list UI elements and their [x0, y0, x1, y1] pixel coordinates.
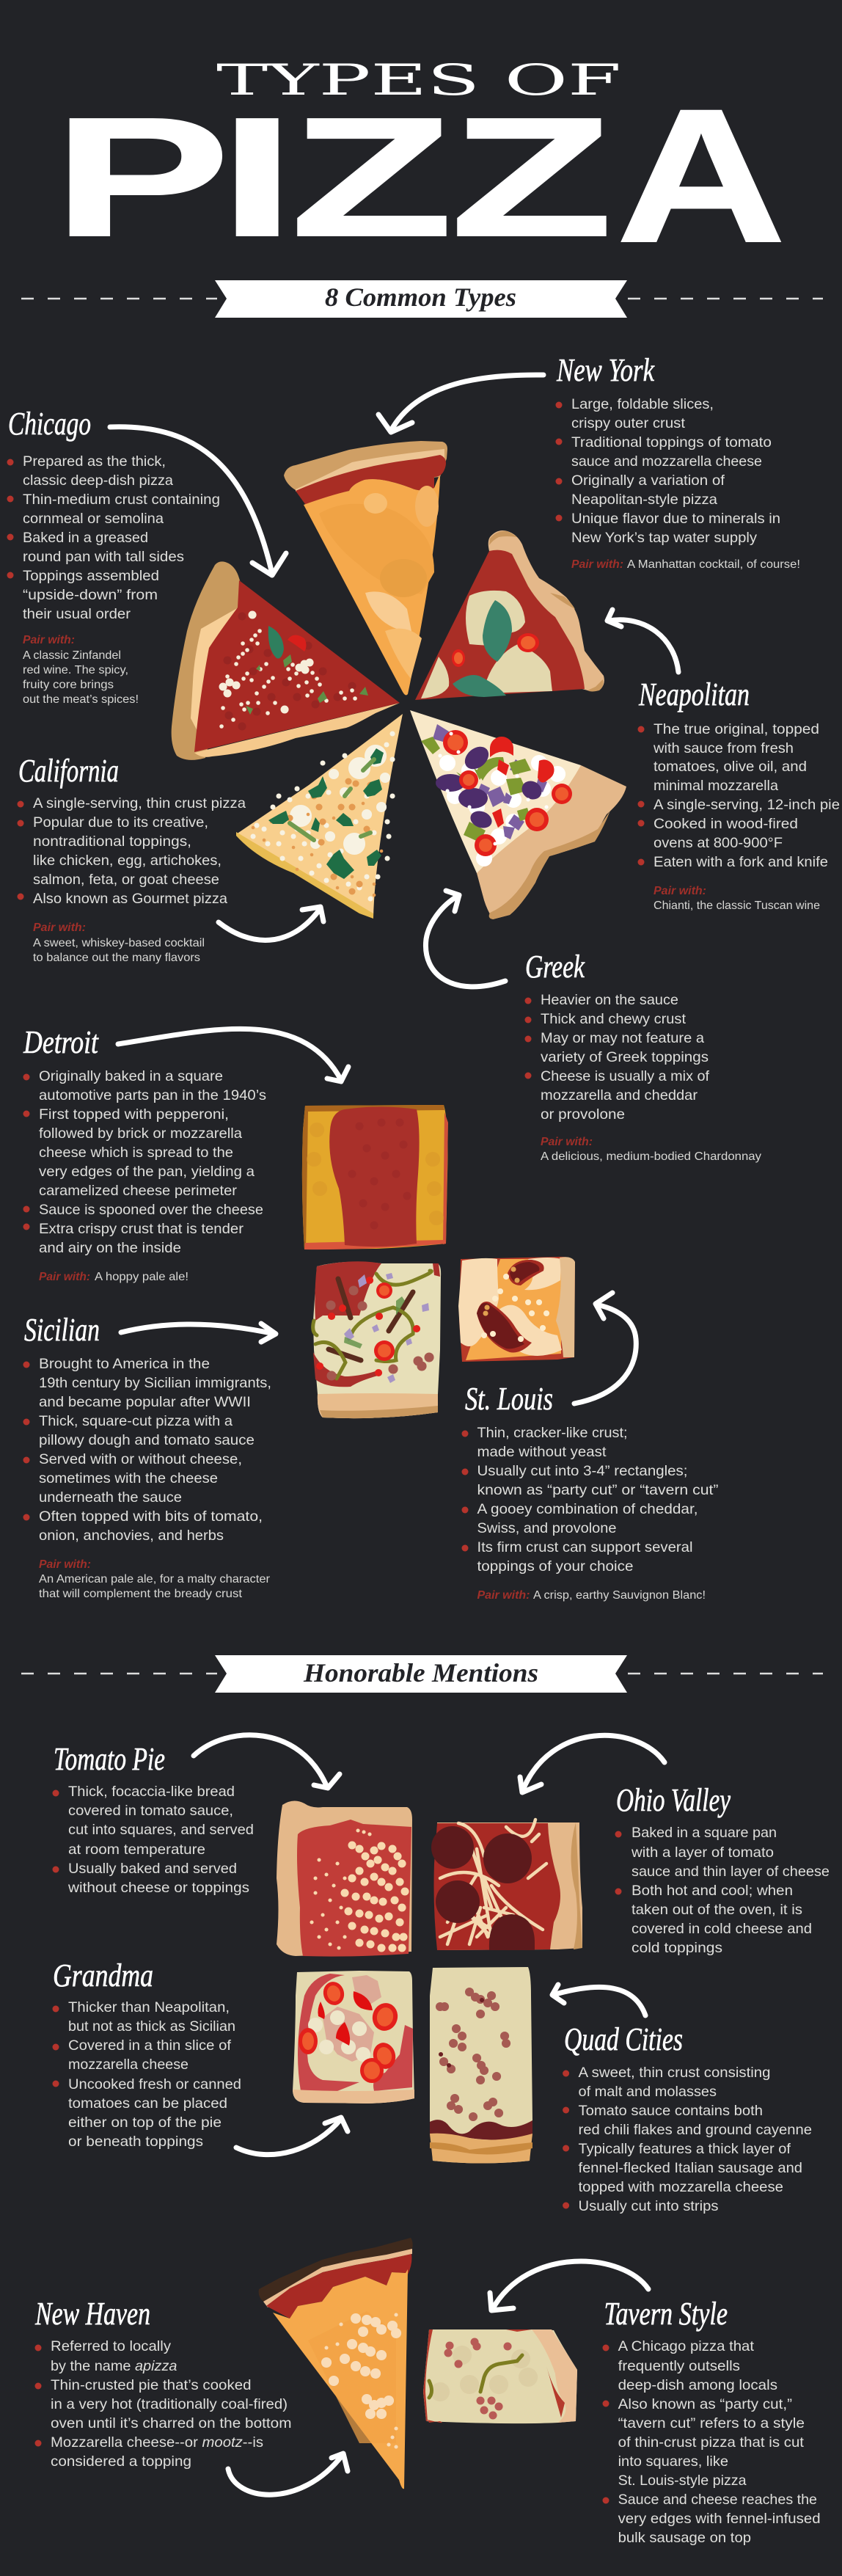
panel: tavern style	[603, 2296, 821, 2546]
panel: detroit	[23, 1024, 266, 1283]
bullet list: Swiss, and provolone	[477, 1520, 616, 1536]
bullet list	[638, 721, 840, 870]
pairing note: A hoppy pale ale!	[95, 1271, 188, 1283]
title line: pizza: I	[219, 83, 296, 271]
bullet list: sometimes with the cheese	[39, 1470, 218, 1486]
section banner: honorable mentions	[21, 1655, 823, 1693]
heading: Detroit	[23, 1024, 99, 1060]
illustration: ohio valley pizza	[431, 1820, 582, 1950]
bullet list: at room temperature	[68, 1842, 205, 1858]
bullet list: Cooked in wood-fired	[654, 816, 798, 832]
bullet list: A sweet, thin crust consisting	[578, 2065, 770, 2081]
bullet list: A Chicago pizza that	[618, 2338, 755, 2354]
bullet list: nontraditional toppings,	[33, 833, 191, 850]
illustration: st. louis pizza	[458, 1257, 575, 1362]
panel: quad cities	[563, 2021, 812, 2214]
pairing note: Pair with:	[39, 1271, 90, 1283]
pairing note: to balance out the many flavors	[33, 952, 200, 964]
bullet list	[462, 1425, 719, 1575]
bullet list: Its firm crust can support several	[477, 1539, 692, 1555]
illustration: chicago slice	[172, 561, 400, 760]
bullet list: deep-dish among locals	[618, 2377, 777, 2393]
bullet list: classic deep-dish pizza	[23, 472, 173, 489]
pairing note: A delicious, medium-bodied Chardonnay	[541, 1150, 761, 1163]
bullet list: pillowy dough and tomato sauce	[39, 1432, 255, 1448]
bullet list: Thin-crusted pie that’s cooked	[51, 2377, 252, 2393]
arrow: new haven	[228, 2453, 348, 2495]
bullet list: Cheese is usually a mix of	[541, 1068, 710, 1084]
bullet list: Thin-medium crust containing	[23, 492, 220, 508]
illustration: tavern style pizza	[423, 2329, 577, 2423]
arrow: tavern style	[490, 2261, 648, 2310]
bullet list: Originally a variation of	[571, 472, 725, 489]
title line: pizza: A	[616, 70, 786, 282]
arrow: california	[219, 907, 323, 940]
bullet list: Prepared as the thick,	[23, 453, 166, 470]
bullet list: 19th century by Sicilian immigrants,	[39, 1375, 271, 1391]
bullet list	[23, 1356, 271, 1544]
bullet list: crispy outer crust	[571, 415, 686, 431]
section banner: honorable mentions: Honorable Mentions	[303, 1658, 538, 1687]
bullet list: or beneath toppings	[68, 2134, 203, 2150]
bullet list: sauce and mozzarella cheese	[571, 453, 762, 470]
bullet list: considered a topping	[51, 2453, 191, 2470]
bullet list: A single-serving, thin crust pizza	[33, 795, 246, 811]
bullet list	[525, 992, 710, 1123]
bullet list: tomatoes, olive oil, and	[654, 759, 807, 775]
bullet list: ovens at 800-900°F	[654, 835, 783, 851]
heading: Ohio Valley	[616, 1782, 731, 1818]
bullet list: Tomato sauce contains both	[578, 2103, 763, 2119]
bullet list: tomatoes can be placed	[68, 2095, 227, 2112]
bullet list: Baked in a square pan	[632, 1825, 777, 1841]
bullet list: mozzarella and cheddar	[541, 1087, 698, 1103]
bullet list: Usually cut into strips	[578, 2198, 719, 2214]
bullet list	[563, 2065, 812, 2214]
bullet list	[18, 795, 246, 907]
panel: new haven	[34, 2296, 291, 2470]
bullet list: Also known as Gourmet pizza	[33, 891, 227, 907]
bullet list: A gooey combination of cheddar,	[477, 1501, 698, 1517]
arrow: grandma	[236, 2117, 348, 2155]
bullet list: cut into squares, and served	[68, 1822, 254, 1838]
pairing note: Pair with:	[541, 1136, 593, 1148]
panel: new york	[556, 352, 800, 571]
bullet list: Traditional toppings of tomato	[571, 434, 772, 450]
bullet list: topped with mozzarella cheese	[578, 2179, 783, 2195]
bullet list: or provolone	[541, 1106, 625, 1123]
illustration: quad cities pizza	[430, 1967, 532, 2163]
bullet list	[35, 2338, 291, 2470]
pairing note: A sweet, whiskey-based cocktail	[33, 937, 205, 949]
arrow: detroit	[118, 1029, 348, 1081]
pairing note	[39, 1558, 271, 1600]
bullet list: Sauce is spooned over the cheese	[39, 1202, 263, 1218]
arrow: ohio valley	[520, 1735, 665, 1792]
bullet list: Thick, focaccia-like bread	[68, 1784, 235, 1800]
bullet list: St. Louis-style pizza	[618, 2473, 747, 2489]
pairing note	[33, 922, 205, 964]
bullet list: but not as thick as Sicilian	[68, 2018, 235, 2035]
bullet list: followed by brick or mozzarella	[39, 1125, 242, 1142]
illustration: sicilian pizza	[313, 1261, 441, 1418]
bullet list: “upside-down” from	[23, 587, 158, 603]
bullet list: mozzarella cheese	[68, 2057, 188, 2073]
bullet list: known as “party cut” or “tavern cut”	[477, 1482, 719, 1498]
bullet list: very edges with fennel-infused	[618, 2511, 821, 2527]
bullet list	[556, 396, 780, 546]
title line: pizza: Z	[290, 83, 453, 271]
panel: greek	[525, 949, 761, 1163]
bullet list: oven until it’s charred on the bottom	[51, 2415, 291, 2431]
bullet list: Covered in a thin slice of	[68, 2037, 232, 2054]
pairing note: A crisp, earthy Sauvignon Blanc!	[533, 1589, 706, 1602]
heading: Tavern Style	[604, 2296, 728, 2332]
pairing note: out the meat’s spices!	[23, 693, 139, 706]
bullet list: Brought to America in the	[39, 1356, 210, 1372]
title line: pizza: Z	[450, 83, 613, 271]
pairing note: Chianti, the classic Tuscan wine	[654, 900, 820, 912]
pairing note: A classic Zinfandel	[23, 649, 121, 662]
pairing note: Pair with:	[571, 558, 623, 571]
pairing note	[654, 885, 820, 912]
bullet list	[23, 1068, 266, 1256]
illustration: neapolitan slice	[415, 530, 604, 700]
bullet list: Neapolitan-style pizza	[571, 492, 717, 508]
bullet list: Unique flavor due to minerals in	[571, 511, 780, 527]
bullet list: bulk sausage on top	[618, 2530, 751, 2546]
section banner: 8 common types	[21, 280, 823, 318]
bullet list: fennel-flecked Italian sausage and	[578, 2160, 802, 2176]
bullet list: frequently outsells	[618, 2358, 740, 2374]
illustration: tomato pie	[277, 1800, 412, 1957]
arrow: tomato pie	[194, 1735, 340, 1788]
arrow: sicilian	[121, 1324, 276, 1342]
bullet list: in a very hot (traditionally coal-fired)	[51, 2396, 288, 2412]
pairing note	[39, 1271, 188, 1283]
bullet list: and airy on the inside	[39, 1240, 181, 1256]
bullet list: salmon, feta, or goat cheese	[33, 872, 219, 888]
arrow: st. louis	[574, 1293, 636, 1404]
heading: Chicago	[8, 406, 91, 442]
title line: pizza	[53, 70, 786, 282]
bullet list: with sauce from fresh	[653, 740, 794, 756]
bullet list: Eaten with a fork and knife	[654, 854, 828, 870]
panel: st. louis	[462, 1381, 719, 1602]
heading: California	[18, 753, 119, 789]
bullet list: Baked in a greased	[23, 530, 148, 546]
illustration: california slice	[236, 714, 403, 919]
bullet list: sauce and thin layer of cheese	[632, 1864, 830, 1880]
pairing note: A Manhattan cocktail, of course!	[627, 558, 800, 571]
pairing note: Pair with:	[33, 922, 86, 934]
bullet list: cheese which is spread to the	[39, 1145, 233, 1161]
panel: california	[18, 753, 246, 964]
arrow: greek	[425, 891, 505, 987]
pairing note: Pair with:	[477, 1589, 530, 1602]
bullet list: Thicker than Neapolitan,	[68, 1999, 230, 2015]
arrow: chicago	[110, 427, 286, 575]
illustration: grandma pizza	[293, 1971, 414, 2104]
pairing note: red wine. The spicy,	[23, 664, 128, 676]
bullet list: Large, foldable slices,	[571, 396, 714, 412]
bullet list: Heavier on the sauce	[541, 992, 678, 1008]
bullet list: Popular due to its creative,	[33, 814, 208, 831]
bullet list: red chili flakes and ground cayenne	[578, 2122, 812, 2138]
bullet list: with a layer of tomato	[631, 1845, 774, 1861]
title line: pizza: P	[53, 83, 230, 271]
bullet list: “tavern cut” refers to a style	[618, 2415, 805, 2431]
bullet list: taken out of the oven, it is	[632, 1902, 802, 1918]
bullet list: either on top of the pie	[68, 2115, 222, 2131]
pairing note: Pair with:	[39, 1558, 91, 1571]
bullet list: their usual order	[23, 606, 131, 622]
panel: chicago	[7, 406, 220, 706]
illustration: new haven slice	[259, 2238, 413, 2489]
pairing note	[23, 634, 139, 706]
bullet list: Thin, cracker-like crust;	[477, 1425, 628, 1441]
bullet list: Sauce and cheese reaches the	[618, 2492, 817, 2508]
pairing note	[541, 1136, 761, 1163]
section banner: 8 common types: 8 Common Types	[325, 282, 516, 312]
panel: ohio valley	[615, 1782, 830, 1956]
bullet list: Typically features a thick layer of	[578, 2141, 791, 2157]
bullet list: variety of Greek toppings	[541, 1049, 709, 1065]
heading: Greek	[525, 949, 585, 985]
bullet list	[603, 2338, 821, 2546]
bullet list: and became popular after WWII	[39, 1394, 251, 1410]
bullet list: made without yeast	[477, 1444, 607, 1460]
bullet list	[53, 1784, 254, 1896]
bullet list: Thick, square-cut pizza with a	[39, 1413, 233, 1429]
bullet list: of malt and molasses	[578, 2084, 717, 2100]
bullet list: onion, anchovies, and herbs	[39, 1528, 224, 1544]
bullet list: Originally baked in a square	[39, 1068, 223, 1084]
bullet list: round pan with tall sides	[23, 549, 184, 565]
panel: sicilian	[23, 1312, 271, 1600]
bullet list	[615, 1825, 830, 1956]
pairing note: An American pale ale, for a malty character	[39, 1573, 271, 1586]
bullet list: Usually baked and served	[68, 1861, 237, 1877]
bullet list: caramelized cheese perimeter	[39, 1183, 238, 1199]
bullet list: A single-serving, 12-inch pie	[654, 797, 840, 813]
bullet list: First topped with pepperoni,	[39, 1106, 229, 1123]
title	[53, 55, 786, 282]
bullet list: by the name apizza	[51, 2358, 177, 2374]
pairing note: Pair with:	[23, 634, 75, 646]
bullet list: Uncooked fresh or canned	[68, 2076, 241, 2092]
heading: Neapolitan	[638, 676, 750, 712]
bullet list: covered in cold cheese and	[632, 1921, 812, 1937]
bullet list: into squares, like	[618, 2453, 728, 2470]
illustration: new york slice	[284, 441, 447, 695]
bullet list: Also known as “party cut,”	[618, 2396, 792, 2412]
bullet list: like chicken, egg, artichokes,	[33, 853, 222, 869]
bullet list: Toppings assembled	[23, 568, 159, 584]
panel: tomato pie	[53, 1741, 254, 1896]
pairing note: that will complement the bready crust	[39, 1588, 243, 1600]
illustration: detroit pizza	[302, 1105, 448, 1249]
bullet list: Mozzarella cheese--or mootz--is	[51, 2434, 263, 2451]
heading: Sicilian	[24, 1312, 100, 1348]
bullet list: covered in tomato sauce,	[68, 1803, 233, 1819]
bullet list: automotive parts pan in the 1940’s	[39, 1087, 266, 1103]
panel: grandma	[53, 1957, 241, 2150]
arrow: neapolitan	[607, 610, 678, 672]
bullet list: Extra crispy crust that is tender	[39, 1221, 244, 1237]
bullet list: Served with or without cheese,	[39, 1451, 242, 1467]
heading: New Haven	[34, 2296, 150, 2332]
bullet list: cornmeal or semolina	[23, 511, 164, 527]
bullet list: very edges of the pan, yielding a	[39, 1164, 255, 1180]
bullet list: minimal mozzarella	[654, 778, 778, 794]
bullet list: The true original, topped	[654, 721, 819, 737]
bullet list: New York’s tap water supply	[571, 530, 757, 546]
illustration: greek slice	[410, 710, 626, 919]
heading: Tomato Pie	[54, 1741, 165, 1777]
bullet list: Referred to locally	[51, 2338, 171, 2354]
heading: St. Louis	[465, 1381, 553, 1417]
bullet list: May or may not feature a	[541, 1030, 704, 1046]
panel: neapolitan	[638, 676, 840, 912]
heading: New York	[556, 352, 655, 388]
bullet list	[53, 1999, 241, 2150]
pairing note: fruity core brings	[23, 679, 114, 691]
arrow: quad cities	[552, 1985, 645, 2015]
pairing note: Pair with:	[654, 885, 706, 897]
arrow: new york	[378, 375, 543, 432]
heading: Quad Cities	[564, 2021, 683, 2057]
bullet list: Both hot and cool; when	[632, 1883, 793, 1899]
bullet list: toppings of your choice	[477, 1558, 634, 1575]
bullet list: cold toppings	[632, 1940, 722, 1956]
bullet list: of thin-crust pizza that is cut	[618, 2434, 805, 2451]
bullet list	[7, 453, 220, 622]
title line: types of: TYPES OF	[216, 55, 621, 105]
bullet list: underneath the sauce	[39, 1489, 182, 1506]
bullet list: Usually cut into 3-4” rectangles;	[477, 1463, 688, 1479]
heading: Grandma	[53, 1957, 153, 1993]
bullet list: Often topped with bits of tomato,	[39, 1508, 263, 1525]
bullet list: Thick and chewy crust	[541, 1011, 687, 1027]
bullet list: without cheese or toppings	[67, 1880, 249, 1896]
